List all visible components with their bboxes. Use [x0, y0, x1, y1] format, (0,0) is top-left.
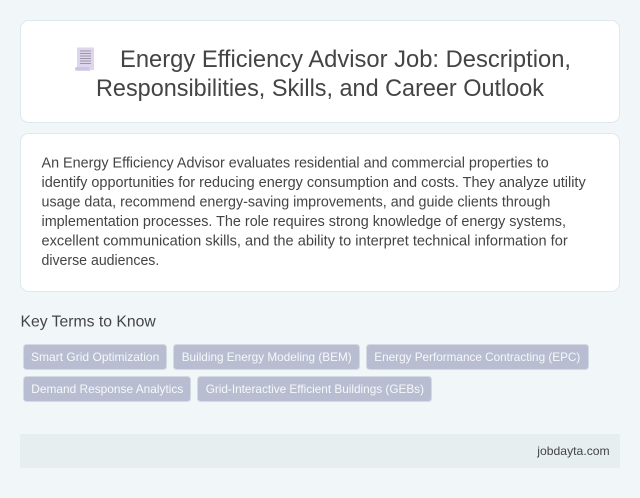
- tag: building energy modeling: Building Energy Modeling (BEM): [182, 350, 352, 364]
- tag: energy performance contracting: Energy Performance Contracting (EPC): [374, 350, 580, 364]
- tag: grid-interactive efficient buildings: [198, 376, 432, 402]
- text block: description: implementation processes. The role requires strong knowledge of energy systems,: [42, 214, 566, 230]
- title: Responsibilities, Skills, and Career Outlook: [96, 75, 545, 102]
- tag: building energy modeling: [174, 344, 360, 370]
- icon: document scroll: [75, 48, 94, 71]
- text block: description: [42, 156, 586, 269]
- title: [96, 46, 571, 102]
- text block: description: identify opportunities for reducing energy consumption and costs. They analyze utility: [42, 175, 586, 191]
- text block: description: excellent communication skills, and the ability to interpret technical information for: [42, 234, 568, 250]
- tag: smart grid optimization: [24, 344, 166, 370]
- panel: title card: [20, 20, 620, 122]
- tag list: key terms: [24, 344, 588, 402]
- tag: demand response analytics: [24, 376, 190, 402]
- heading: key terms: Key Terms to Know: [20, 314, 156, 331]
- footer: [20, 434, 620, 468]
- title: Energy Efficiency Advisor Job: Description,: [120, 46, 571, 73]
- panel: description card: [20, 134, 620, 292]
- text block: description: diverse audiences.: [42, 253, 159, 269]
- text block: description: usage data, recommend energy-saving improvements, and guide clients through: [42, 195, 550, 211]
- tag: energy performance contracting: [366, 344, 588, 370]
- tag: smart grid optimization: Smart Grid Optimization: [31, 350, 159, 364]
- tag: grid-interactive efficient buildings: Grid-Interactive Efficient Buildings (GEBs): [206, 382, 424, 396]
- tag: demand response analytics: Demand Response Analytics: [31, 382, 183, 396]
- footer: jobdayta.com: [536, 444, 610, 458]
- text block: description: An Energy Efficiency Advisor evaluates residential and commercial properties to: [42, 156, 549, 172]
